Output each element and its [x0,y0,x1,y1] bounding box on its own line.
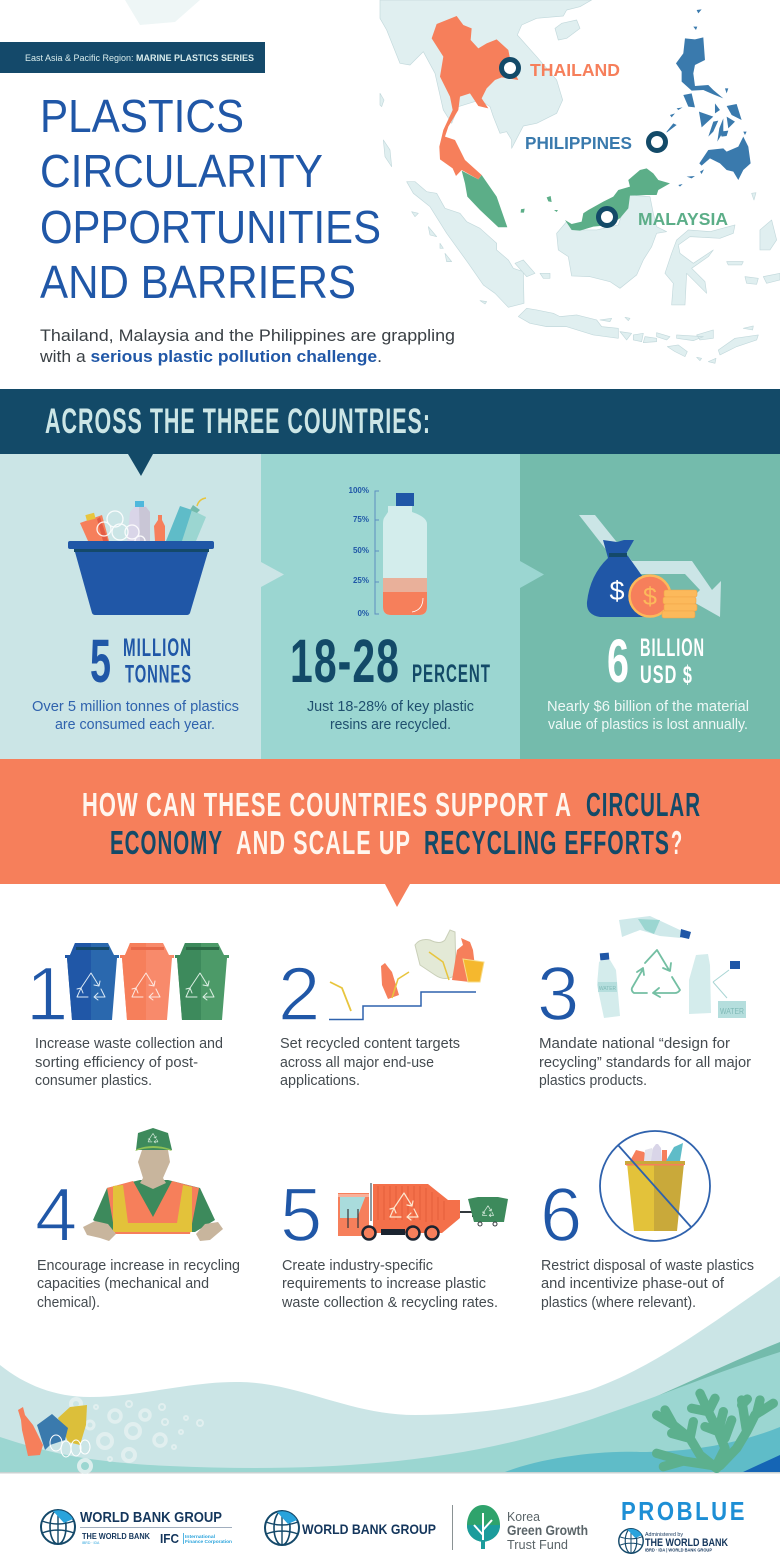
chart: bottle recycled share: 0% [357,609,369,618]
text: recycling” standards for all major [539,1055,751,1071]
text [37,1258,240,1311]
description: Just 18-28% of key plastic [307,699,474,715]
banner: how can these countries: CIRCULAR [586,786,701,823]
text: consumer plastics. [35,1073,152,1089]
figure: 5 million tonnes: MILLION [123,634,192,662]
banner: how can these countries: AND SCALE UP [236,824,411,861]
text: capacities (mechanical and [37,1276,209,1292]
text: requirements to increase plastic [282,1276,486,1292]
icon: money bag, coins and falling arrow: $ [643,583,657,611]
text [280,1036,460,1089]
land: Borneo [557,195,667,288]
text [281,1258,498,1311]
step 6 [540,1131,754,1311]
land: Hainan [555,20,580,40]
text: applications. [280,1073,360,1089]
text: waste collection & recycling rates. [281,1295,498,1311]
number 4: 4 [35,1173,77,1258]
logo: World Bank Group and IFC: THE WORLD BANK [82,1532,150,1541]
logo: administered by the World Bank: IBRD · IDA | WORLD BANK GROUP [645,1548,712,1552]
description: Over 5 million tonnes of plastics [32,699,239,715]
icon: bottles and recycling arrows: WATER [599,986,616,992]
land: Sumatra [407,182,524,307]
banner: how can these countries [0,759,780,907]
land: mainland Southeast Asia [380,0,592,148]
icon: prohibited plastics bin [600,1131,710,1241]
step 4 [35,1128,240,1311]
description: are consumed each year. [55,717,215,733]
chart: bottle recycled share [349,486,427,618]
stat panel backgrounds [0,454,780,759]
number 5: 5 [280,1173,322,1258]
icon: floating plastics [18,1405,90,1457]
title: CIRCULARITY [40,145,323,197]
banner: across the three countries: ACROSS THE THREE COUNTRIES: [45,402,431,441]
figure: 6 billion USD: USD $ [640,661,693,689]
title [40,90,381,308]
series tag [0,42,265,73]
banner: how can these countries: ECONOMY [110,824,223,861]
title: PLASTICS [40,90,244,142]
text: Encourage increase in recycling [37,1258,240,1274]
banner: how can these countries: ? [671,824,683,861]
panel: 5 million tonnes [32,498,239,733]
logo: World Bank Group and IFC: IBRD · IDA [82,1541,100,1545]
number 6: 6 [540,1173,582,1258]
panel: 6 billion USD [547,515,749,733]
logo: Korea Green Growth Trust Fund: Korea [507,1509,541,1524]
figure: 6 billion USD: BILLION [640,634,705,662]
number 1: 1 [26,952,68,1037]
Malaysia shape [462,168,670,231]
text [35,1036,223,1089]
icon: garbage truck with bin [338,1183,508,1240]
icon: bottles and recycling arrows: WATER [720,1007,744,1016]
step 2 [278,930,484,1089]
text: Create industry-specific [282,1258,433,1274]
Philippines shape [667,9,751,187]
figure: 5 million tonnes: TONNES [125,660,192,688]
panel: 18-28 percent [290,486,491,733]
intro text: Thailand, Malaysia and the Philippines are grappling [40,326,455,345]
description: Nearly $6 billion of the material [547,699,749,715]
text: and incentivize phase-out of [541,1276,725,1292]
ocean waves [0,1276,780,1474]
map of Southeast Asia [125,0,780,363]
land: smaller islands [380,93,780,363]
icon: rising stairs with plastics [329,930,484,1020]
logo: administered by the World Bank: THE WORLD BANK [645,1537,728,1549]
text: Set recycled content targets [280,1036,460,1052]
figure: 5 million tonnes [90,627,192,695]
text: Mandate national “design for [539,1036,730,1052]
icon: coral [657,1393,773,1468]
text: plastics (where relevant). [541,1295,696,1311]
logo: World Bank Group and IFC: WORLD BANK GROUP [80,1510,222,1526]
chart: bottle recycled share: 100% [349,486,369,495]
text: Restrict disposal of waste plastics [541,1258,754,1274]
Thailand shape [432,16,518,179]
intro text [39,326,455,366]
description [32,699,239,733]
figure: 6 billion USD [607,627,705,695]
icon: money bag, coins and falling arrow [579,515,721,618]
text: sorting efficiency of post- [35,1055,198,1071]
icon: basket of plastics [68,498,214,615]
pin: Malaysia [598,208,616,226]
logo: World Bank Group and IFC [41,1510,232,1546]
logo: Korea Green Growth Trust Fund: Trust Fund [507,1537,568,1552]
step 1 [26,943,229,1089]
logo: administered by the World Bank [619,1529,728,1553]
pin: Thailand [502,60,518,76]
figure: 6 billion USD: 6 [607,627,630,695]
number 2: 2 [278,952,320,1037]
series tag: East Asia & Pacific Region: MARINE PLASTICS SERIES [25,53,254,64]
text: Increase waste collection and [35,1036,223,1052]
step 5 [280,1173,508,1311]
figure: 18-28 percent: PERCENT [412,660,491,688]
banner: across the three countries [0,389,780,476]
description [307,699,474,733]
logo: Korea Green Growth Trust Fund [452,1505,588,1552]
icon: sanitation worker [83,1128,223,1241]
icon: bottles and recycling arrows [597,916,746,1018]
text [539,1036,751,1089]
number 3: 3 [537,952,579,1037]
description: value of plastics is lost annually. [548,717,748,733]
chart: bottle recycled share: 75% [353,515,369,524]
title: OPPORTUNITIES [40,201,381,253]
title: AND BARRIERS [40,256,356,308]
logo: administered by the World Bank: Administered by [645,1532,683,1538]
logo: Korea Green Growth Trust Fund: Green Growth [507,1523,588,1538]
logo: PROBLUE: PROBLUE [621,1496,747,1526]
label: Philippines: PHILIPPINES [525,133,632,153]
land: Sulawesi [665,225,735,305]
text: plastics products. [539,1073,647,1089]
figure: 5 million tonnes: 5 [90,627,112,695]
text: chemical). [37,1295,100,1311]
pin: Philippines [648,134,666,150]
land: Java [518,308,618,338]
description [547,699,749,733]
logo: World Bank Group [265,1511,436,1545]
text [541,1258,754,1311]
land: faint top-left shape [125,0,200,25]
label: Malaysia: MALAYSIA [638,209,728,229]
logo: World Bank Group: WORLD BANK GROUP [302,1521,436,1537]
icon: money bag, coins and falling arrow: $ [609,576,625,606]
chart: bottle recycled share: 25% [353,576,369,585]
label: Thailand: THAILAND [530,60,620,80]
description: resins are recycled. [330,717,451,733]
bubbles [71,1399,203,1472]
intro text: with a serious plastic pollution challenge . [39,347,382,366]
logo: World Bank Group and IFC: International [185,1534,215,1539]
logo: World Bank Group and IFC: IFC [160,1531,180,1546]
logo: World Bank Group and IFC: Finance Corporation [185,1539,232,1544]
figure: 18-28 percent: 18-28 [290,627,400,695]
text: across all major end-use [280,1055,434,1071]
chart: bottle recycled share: 50% [353,546,369,555]
icon: three recycling bins [65,943,229,1020]
step 3 [537,916,751,1089]
